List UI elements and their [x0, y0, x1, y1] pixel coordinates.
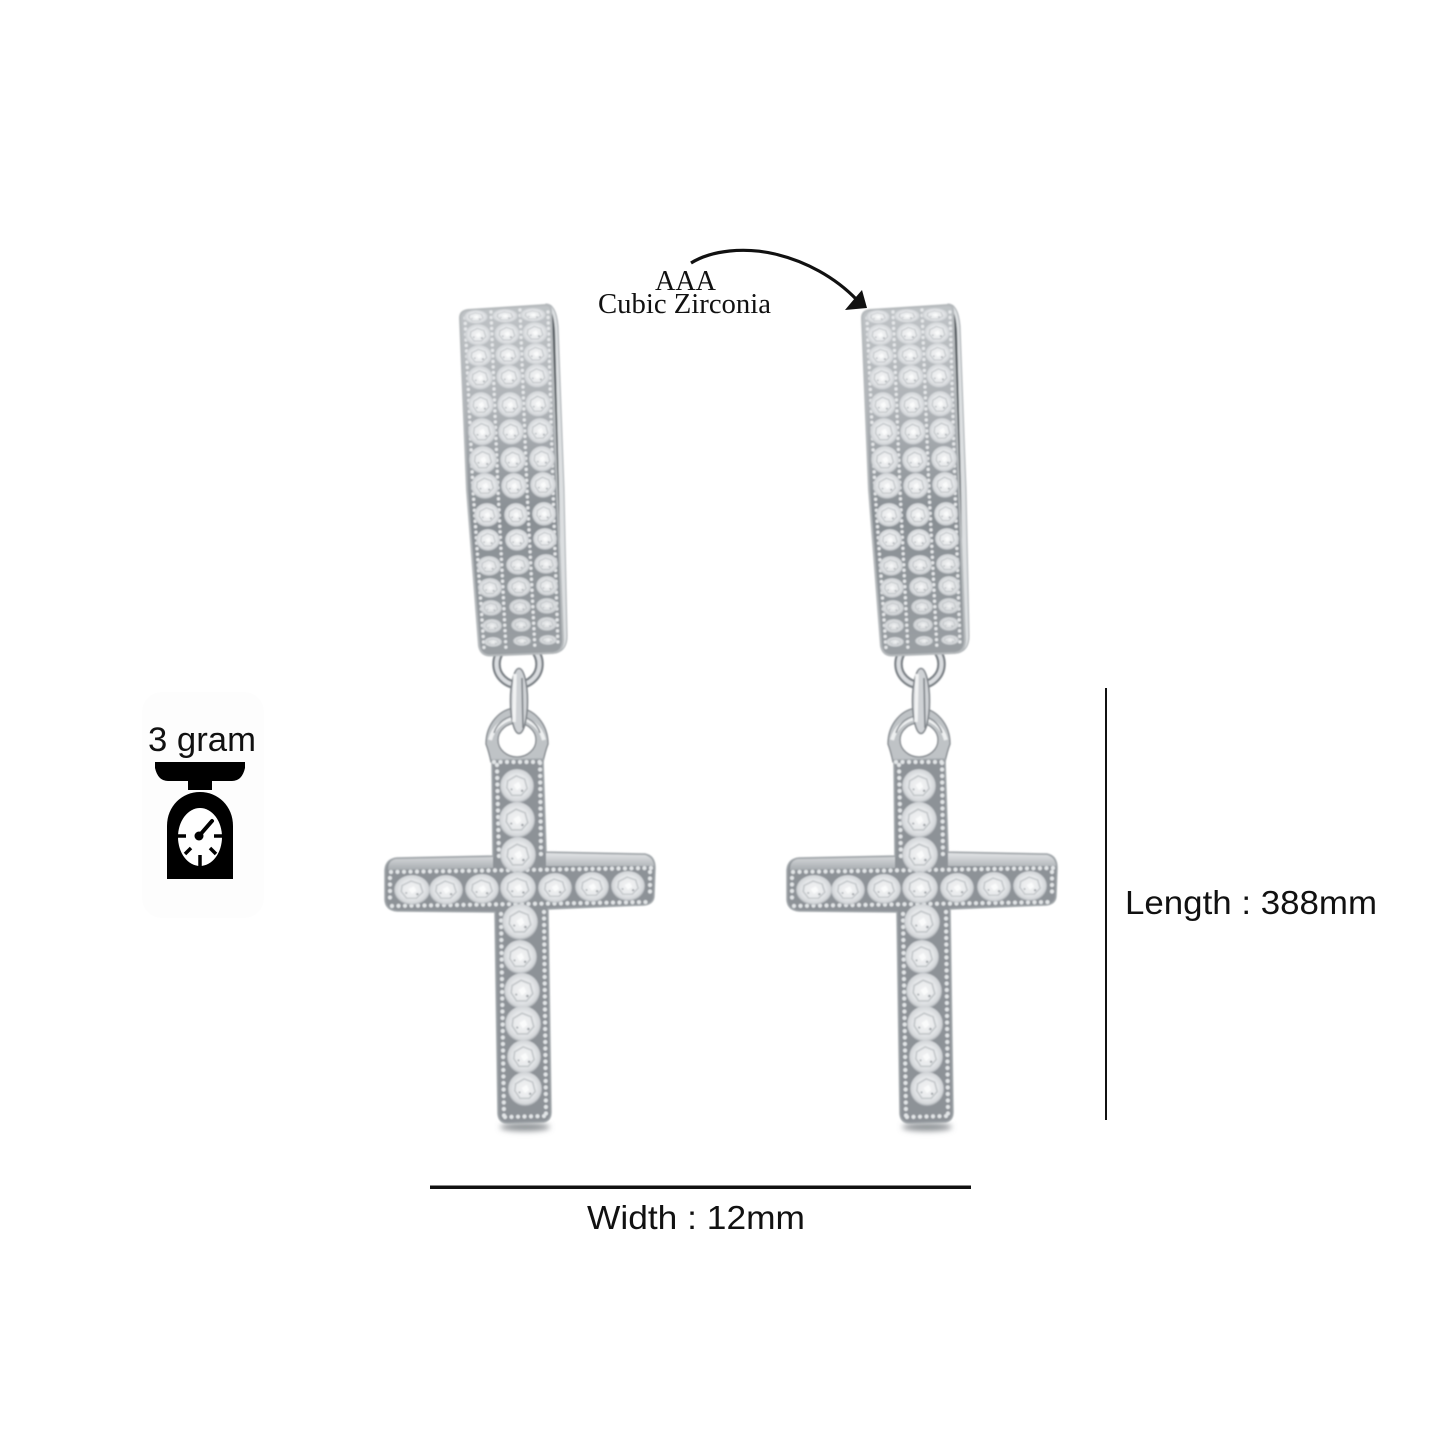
callout: AAA Cubic Zirconia label — [598, 266, 771, 320]
length dimension line — [1105, 688, 1107, 1120]
earring: left — [385, 304, 655, 1131]
width dimension line — [430, 1186, 971, 1189]
callout: AAA Cubic Zirconia label: Cubic Zirconia — [598, 289, 771, 320]
callout: AAA Cubic Zirconia label: AAA — [655, 266, 717, 297]
weight label: 3 gram — [148, 721, 256, 759]
weight icon: kitchen scale with label — [142, 692, 264, 918]
width label: Width : 12mm — [587, 1199, 805, 1236]
length label: Length : 388mm — [1125, 884, 1377, 921]
earring: right — [787, 304, 1057, 1131]
arrow: to stones — [691, 250, 867, 310]
icon: scale — [155, 762, 245, 879]
